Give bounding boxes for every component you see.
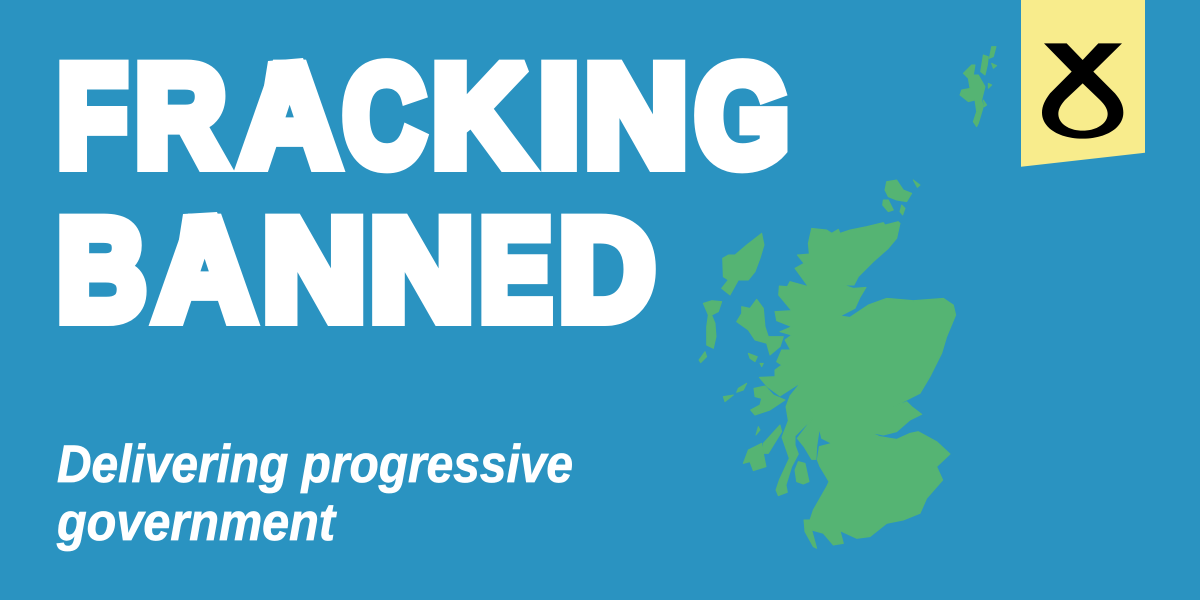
icon: snp thistle loop — [1042, 43, 1123, 139]
map: shetland — [960, 47, 997, 127]
title line 1: R — [135, 36, 226, 196]
title line 2: A — [155, 190, 255, 350]
subtitle: delivering progressive government — [56, 435, 573, 552]
title line 1: N — [585, 37, 688, 196]
map of scotland — [699, 47, 997, 548]
subtitle: delivering progressive government: Delivering progressive — [57, 435, 573, 494]
title: fracking banned — [57, 36, 789, 350]
title line 2: E — [479, 190, 552, 349]
title letter A shoulders — [177, 58, 318, 252]
map: orkney — [883, 180, 920, 215]
map: western isles and inner islands — [699, 233, 809, 484]
title line 2: B — [57, 191, 146, 350]
title line 2 — [57, 190, 655, 350]
title line 2: N — [263, 191, 366, 350]
title line 1: I — [539, 36, 580, 196]
title line 1: F — [57, 37, 127, 196]
title line 1: C — [343, 36, 425, 196]
subtitle: delivering progressive government: government — [56, 493, 337, 552]
title line 1: G — [695, 36, 789, 196]
snp logo flag — [1021, 0, 1145, 167]
title line 2: D — [559, 191, 655, 350]
flag background — [1021, 0, 1145, 167]
title line 1 — [57, 36, 789, 196]
title line 1: K — [432, 36, 529, 196]
title line 2: N — [370, 191, 474, 350]
map: mainland — [759, 222, 956, 548]
title line 1: A — [240, 36, 340, 196]
